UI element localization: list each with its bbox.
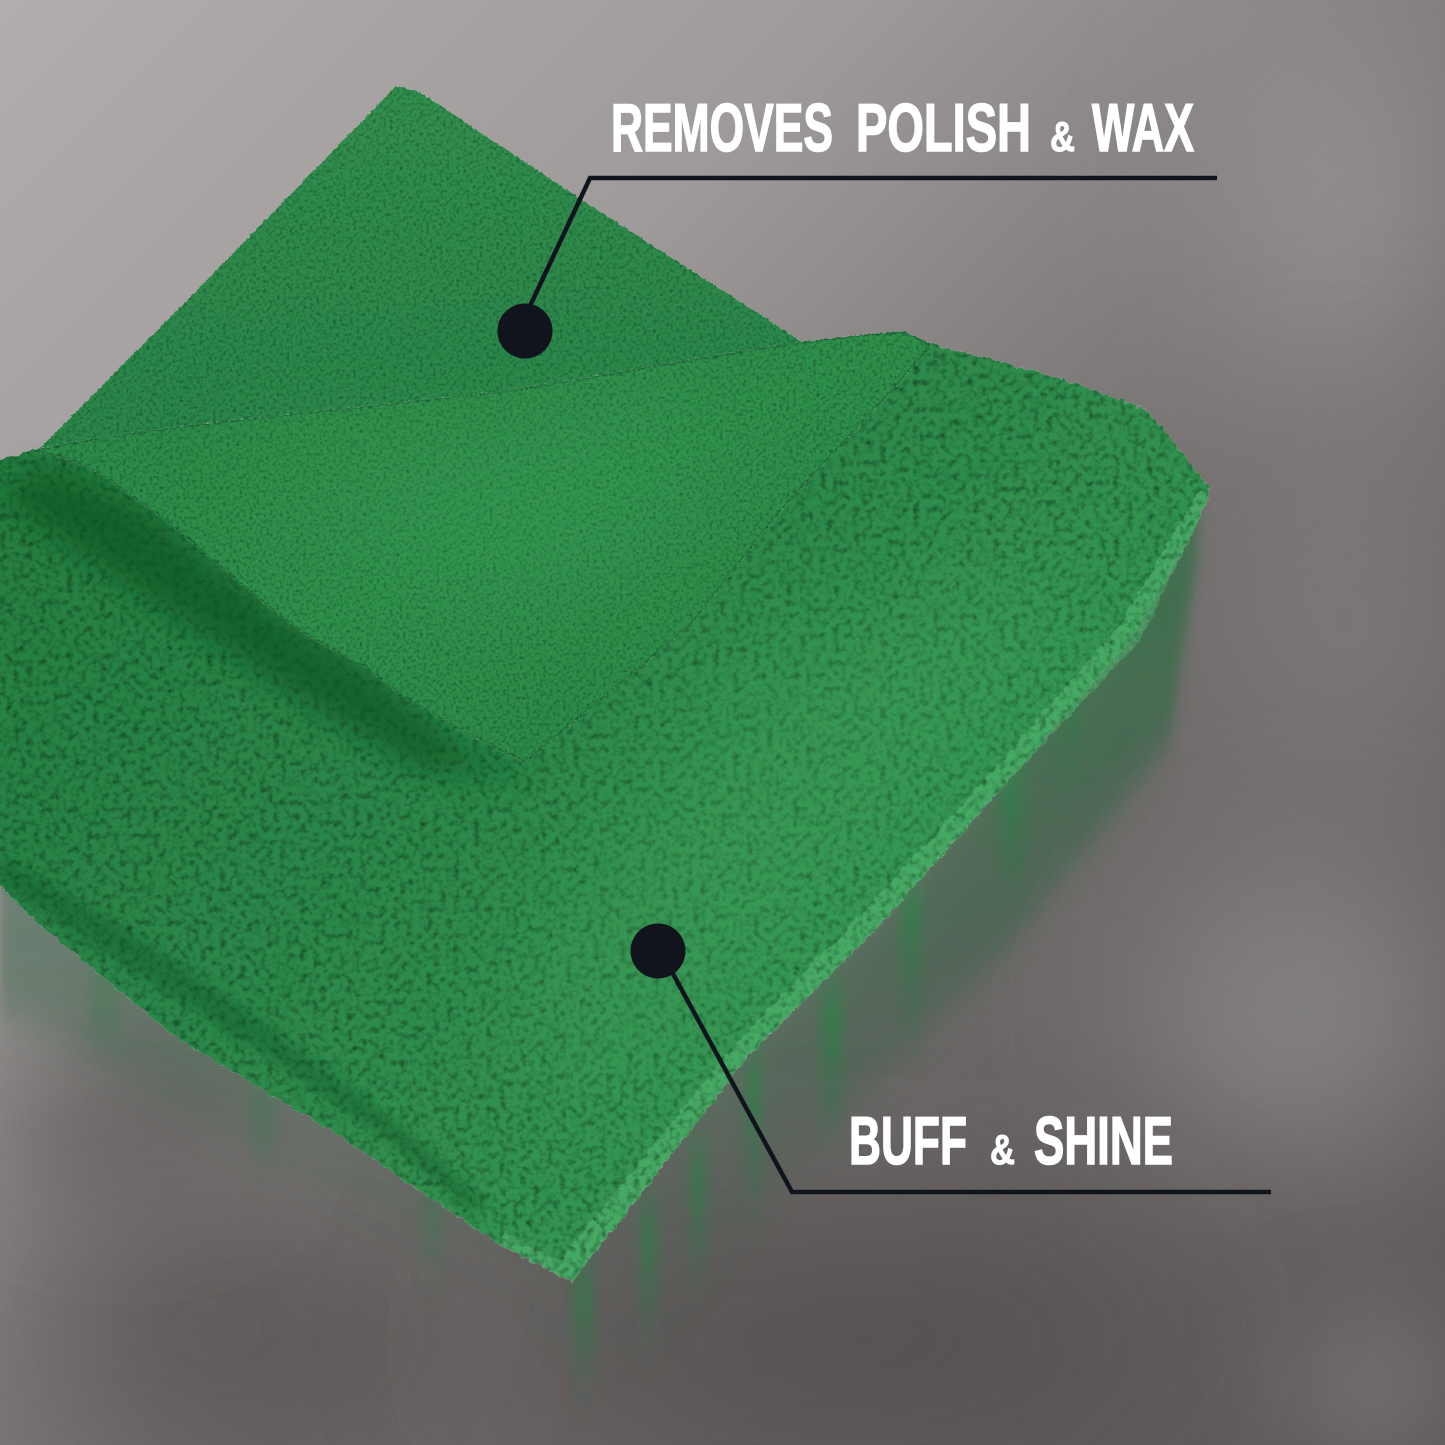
leader line: bottom callout: [672, 972, 1271, 1192]
green towel reflection on metal: [0, 500, 1205, 1400]
towel: body lit area: [500, 560, 1120, 1130]
callout: buff and shine: [630, 924, 1271, 1192]
callout heading: buff and shine: BUFF: [849, 1103, 967, 1179]
leader line: top callout: [530, 178, 1217, 306]
callout: removes polish and wax: [498, 90, 1217, 358]
towel: flap lit area: [220, 400, 760, 620]
towel: dark fold between layers: [0, 855, 490, 1212]
towel: [0, 86, 1210, 1282]
callout heading: removes polish and wax: REMOVES: [611, 90, 833, 166]
callout heading: removes polish and wax: [611, 90, 1194, 166]
marker dot: top callout: [498, 304, 552, 358]
towel: lower folded body: [0, 333, 1210, 1282]
callout heading: buff and shine: [849, 1103, 1173, 1179]
callout heading: removes polish and wax: &: [1050, 113, 1075, 160]
callout heading: buff and shine: &: [990, 1126, 1015, 1173]
marker dot: bottom callout: [630, 924, 686, 978]
towel: shadow under flap: [0, 465, 540, 775]
towel: upper sheet: [40, 86, 815, 448]
towel: front edge highlight: [500, 490, 1210, 1282]
towel: folded-back flap: [30, 332, 930, 762]
callout heading: buff and shine: SHINE: [1034, 1103, 1173, 1179]
callout heading: removes polish and wax: WAX: [1092, 90, 1194, 166]
callout heading: removes polish and wax: POLISH: [856, 90, 1031, 166]
